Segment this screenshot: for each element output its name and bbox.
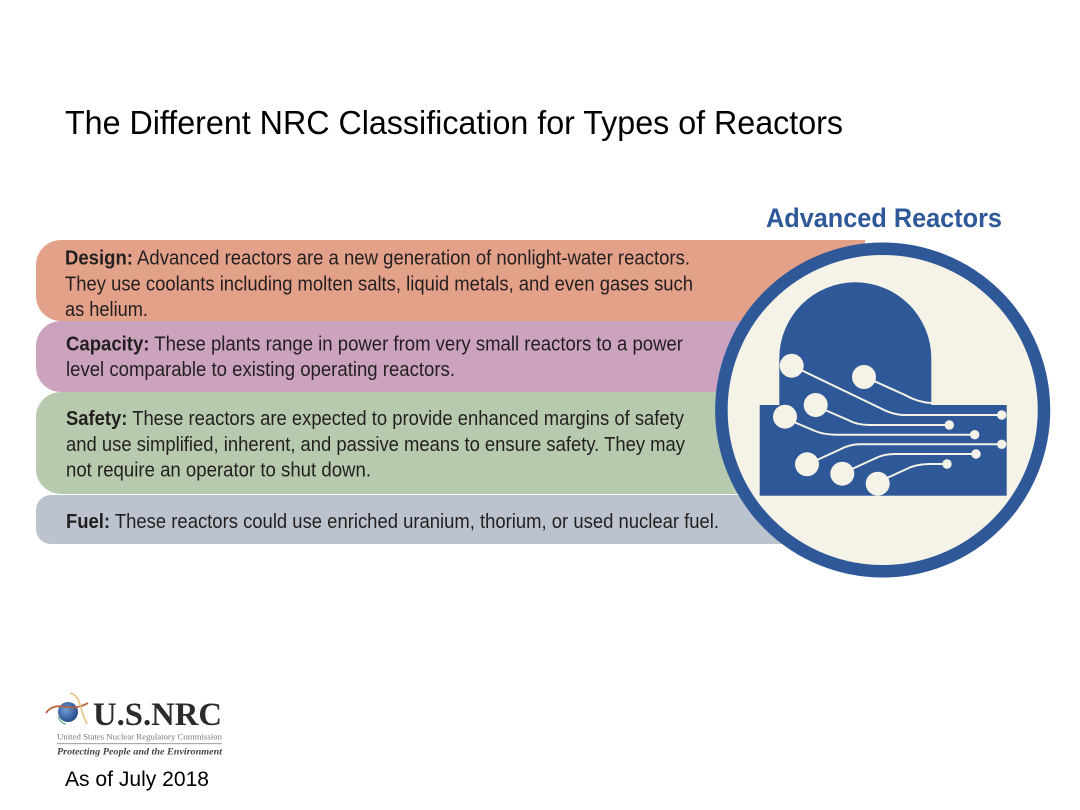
logo agency name: United States Nuclear Regulatory Commission xyxy=(57,732,223,742)
heading: advanced reactors: Advanced Reactors xyxy=(766,203,1002,233)
safety text: and use simplified, inherent, and passive means to ensure safety. They may xyxy=(66,434,685,456)
icon: advanced reactor badge xyxy=(721,249,1044,571)
icon: reactor base xyxy=(760,405,1007,496)
fuel text: Fuel: These reactors could use enriched uranium, thorium, or used nuclear fuel. xyxy=(66,511,719,533)
logo tagline: Protecting People and the Environment xyxy=(57,748,222,758)
design text: Design: Advanced reactors are a new generation of nonlight-water reactors. xyxy=(65,248,690,270)
panel: design xyxy=(36,240,865,321)
design text: as helium. xyxy=(65,299,148,321)
safety text: not require an operator to shut down. xyxy=(66,460,371,482)
icon: circuit lines xyxy=(794,370,1001,478)
capacity text: Capacity: These plants range in power from very small reactors to a power xyxy=(66,334,683,356)
panel: capacity xyxy=(36,321,800,392)
safety text xyxy=(66,408,685,482)
panel: fuel xyxy=(36,495,830,544)
capacity text: level comparable to existing operating reactors. xyxy=(66,359,455,381)
safety text: Safety: These reactors are expected to provide enhanced margins of safety xyxy=(66,408,684,430)
design text: They use coolants including molten salts, liquid metals, and even gases such xyxy=(65,274,693,296)
logo wordmark: U.S.NRC xyxy=(93,697,222,733)
date note: As of July 2018 xyxy=(65,768,209,791)
icon: circuit nodes xyxy=(773,354,1006,496)
icon: atom globe xyxy=(46,693,88,724)
title: The Different NRC Classification for Types of Reactors xyxy=(65,104,843,141)
capacity text xyxy=(66,334,683,381)
icon: reactor dome xyxy=(779,282,931,406)
logo: U.S. NRC xyxy=(46,693,223,758)
design text xyxy=(65,248,693,321)
panel: safety xyxy=(36,392,800,494)
